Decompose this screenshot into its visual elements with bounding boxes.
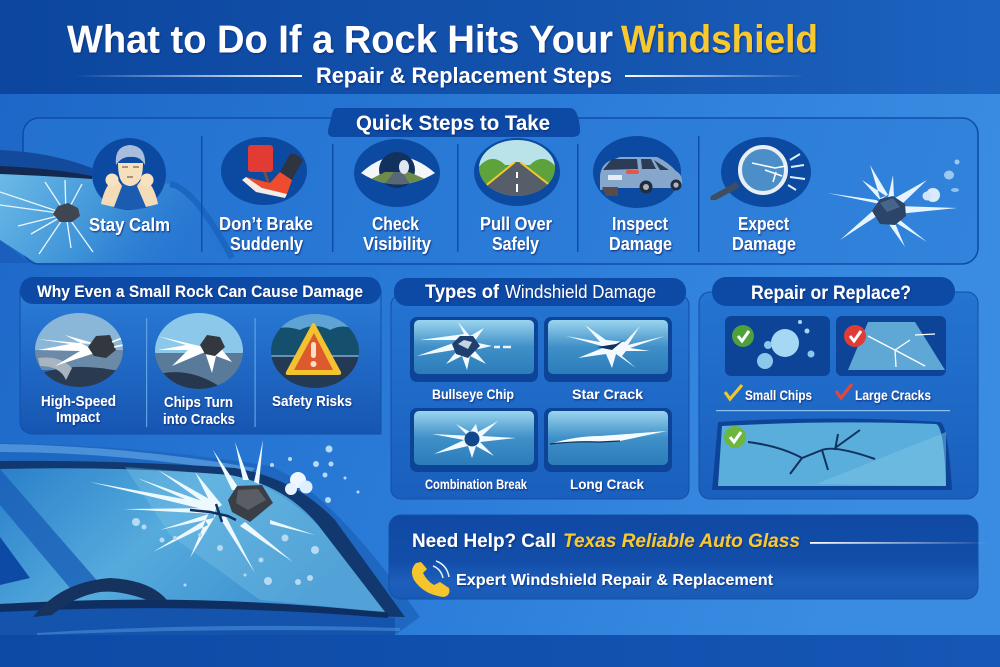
section tab: Quick Steps to Take xyxy=(356,112,550,135)
rock xyxy=(228,485,273,522)
tile: star crack xyxy=(544,317,672,382)
section heading xyxy=(20,277,381,304)
label: chips turn into cracks xyxy=(163,394,235,428)
label: pull over safely: Safely xyxy=(492,234,539,254)
label: don't brake suddenly: Don’t Brake xyxy=(219,214,313,234)
title: What to Do If a Rock Hits Your xyxy=(67,18,613,62)
tile: combination break xyxy=(410,408,538,472)
label: expect damage: Expect xyxy=(738,214,789,234)
label: small chips: Small Chips xyxy=(745,387,812,403)
tile: small chips xyxy=(725,316,830,376)
section heading: Windshield Damage xyxy=(505,282,656,302)
bottom windshield illustration xyxy=(0,443,420,635)
label: chips turn into cracks: into Cracks xyxy=(163,411,235,428)
icon: stay calm person xyxy=(92,138,166,210)
big impact cracks xyxy=(90,440,315,573)
tile: long crack xyxy=(544,408,672,472)
label: large cracks xyxy=(836,384,931,403)
tile: large cracks xyxy=(836,316,946,376)
section heading xyxy=(394,278,686,306)
label: inspect damage: Damage xyxy=(609,234,672,254)
panel: call to action xyxy=(389,515,990,599)
header band xyxy=(0,0,1000,94)
label: combination break: Combination Break xyxy=(425,477,527,492)
label: check visibility: Check xyxy=(372,214,420,234)
tile: bullseye chip xyxy=(410,317,538,382)
call heading: Need Help? Call xyxy=(412,531,556,552)
icon: phone xyxy=(412,561,449,597)
icon: car xyxy=(593,136,682,208)
subtitle with rules: Repair & Replacement Steps xyxy=(316,63,612,88)
call heading xyxy=(412,531,800,552)
label: high-speed impact xyxy=(41,393,116,426)
section heading: Why Even a Small Rock Can Cause Damage xyxy=(37,282,363,301)
panel: quick steps xyxy=(0,108,978,264)
label: pull over safely: Pull Over xyxy=(480,214,552,234)
dust puff and debris xyxy=(132,446,360,586)
section heading xyxy=(712,277,955,306)
label: pull over safely xyxy=(480,214,552,254)
icon: brake pedal xyxy=(221,137,307,205)
icon: high-speed impact xyxy=(35,313,123,387)
panel: why a small rock causes damage xyxy=(20,277,381,434)
label: stay calm: Stay Calm xyxy=(89,215,170,235)
label: expect damage xyxy=(732,214,796,254)
label: chips turn into cracks: Chips Turn xyxy=(164,394,233,411)
label: don't brake suddenly xyxy=(219,214,313,254)
label: large cracks: Large Cracks xyxy=(855,387,931,403)
label: long crack: Long Crack xyxy=(570,476,644,492)
label: bullseye chip: Bullseye Chip xyxy=(432,386,514,402)
panel: repair or replace xyxy=(699,277,978,499)
icon: magnifying glass xyxy=(710,137,811,207)
label: star crack: Star Crack xyxy=(572,386,643,402)
label: check visibility xyxy=(363,214,431,254)
panel: types of windshield damage xyxy=(391,278,689,499)
label: small chips xyxy=(725,385,812,403)
title: Windshield xyxy=(621,18,818,62)
section heading: Repair or Replace? xyxy=(751,283,911,304)
label: safety risks: Safety Risks xyxy=(272,393,352,410)
label: high-speed impact: Impact xyxy=(56,409,100,426)
illustration: rock impact burst xyxy=(827,160,960,247)
tile: windshield with long crack xyxy=(712,418,952,490)
windshield corner illustration xyxy=(0,150,232,263)
label: expect damage: Damage xyxy=(732,234,796,254)
label: high-speed impact: High-Speed xyxy=(41,393,116,410)
section tab xyxy=(328,108,580,137)
section heading: Types of xyxy=(425,282,500,303)
icon: chips turn into cracks xyxy=(155,313,243,390)
icon: eye xyxy=(354,139,440,207)
icon: road xyxy=(470,138,565,206)
icon: safety warning sign xyxy=(271,314,359,388)
description: Expert Windshield Repair & Replacement xyxy=(456,572,774,589)
call heading: Texas Reliable Auto Glass xyxy=(563,531,800,552)
label: inspect damage xyxy=(609,214,672,254)
label: inspect damage: Inspect xyxy=(612,214,668,234)
bottom band xyxy=(0,635,1000,667)
label: check visibility: Visibility xyxy=(363,234,431,254)
label: don't brake suddenly: Suddenly xyxy=(230,234,303,254)
